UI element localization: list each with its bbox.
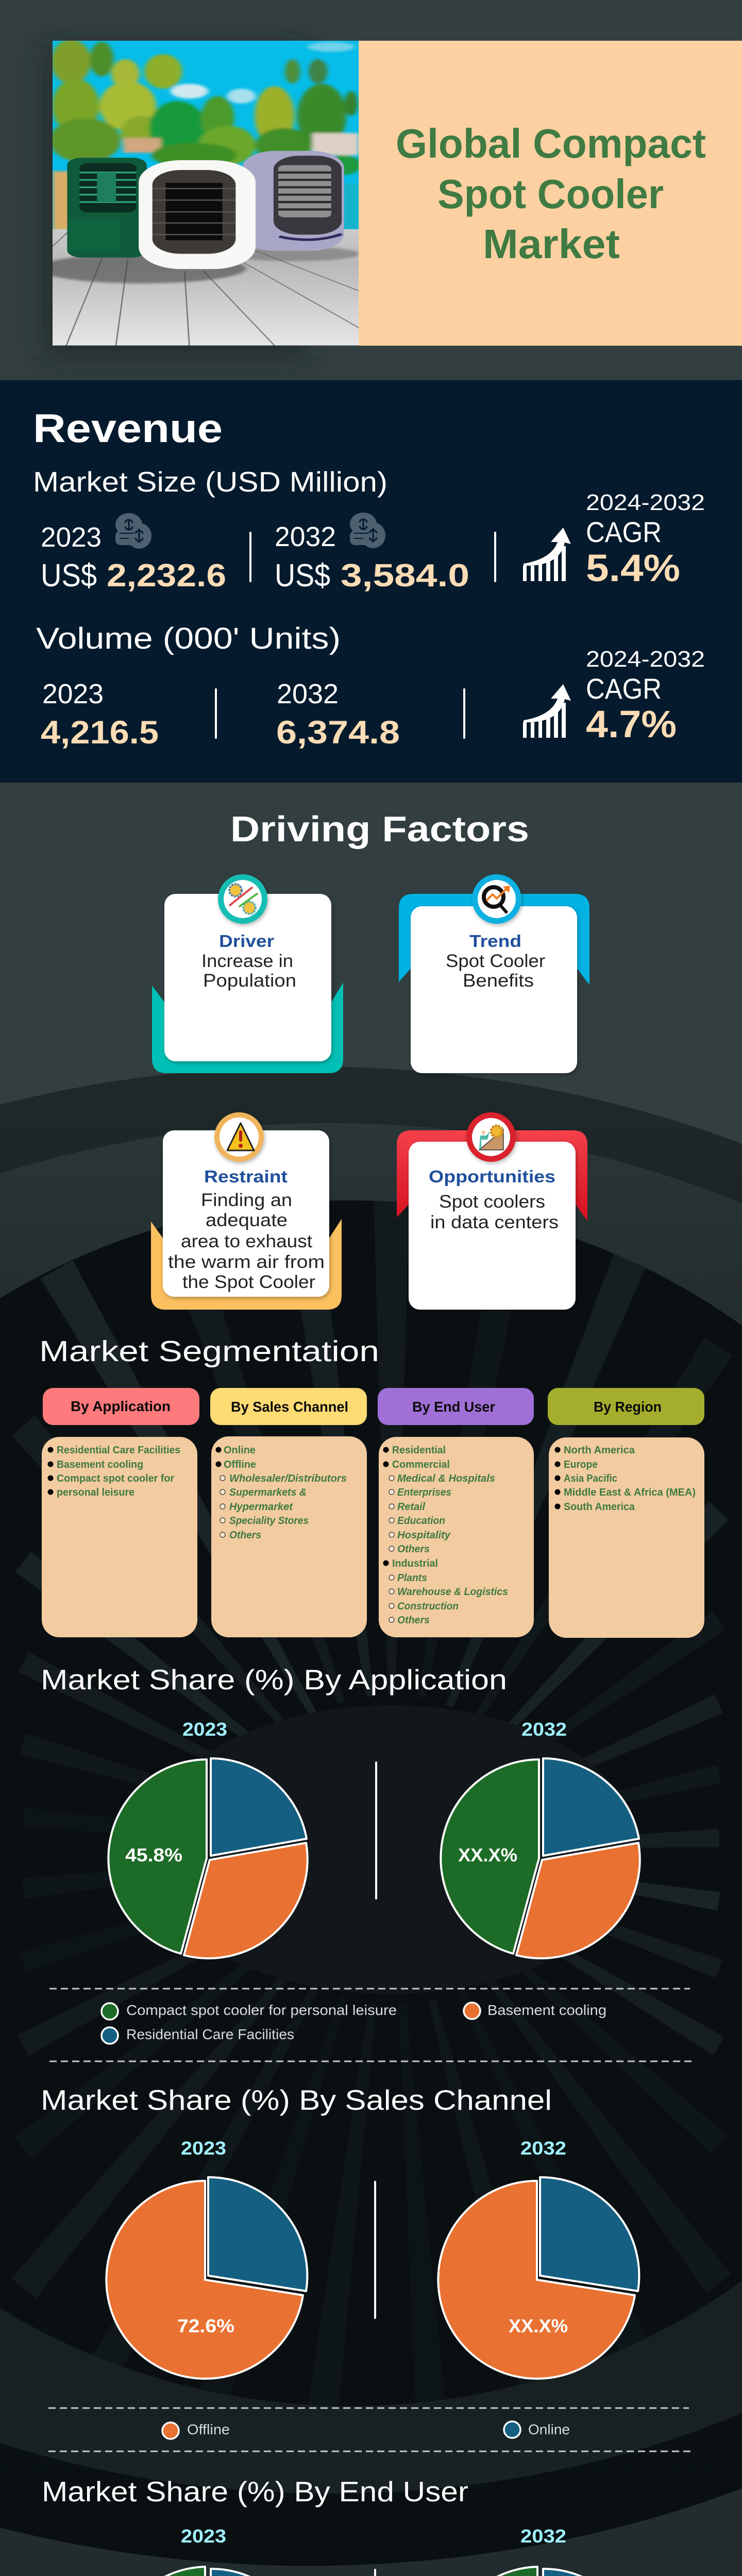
list: sales channel: Speciality Stores [229,1515,309,1527]
pie chart: sales channel 2032 [438,2138,639,2379]
CAGR revenue [586,490,705,589]
pie chart: application 2032: XX.X% [458,1844,517,1866]
revenue heading: Revenue [33,405,223,451]
panel: trend [399,874,589,1073]
hero photo: three compact coolers on a deck [38,40,361,346]
panel: by region [548,1388,704,1638]
list: end user: Education [397,1515,445,1527]
list: application: Residential Care Facilities [57,1445,180,1456]
icon: coins 2032 [350,513,385,548]
list: end user: Commercial [392,1459,450,1470]
panel: trend: Spot Cooler [446,951,545,971]
CAGR volume: CAGR [586,672,662,705]
pie chart: application 2023: 2023 [182,1719,227,1740]
legend: application: Compact spot cooler for personal leisure [126,2002,397,2018]
list: end user: Hospitality [397,1530,451,1541]
market size 2023 [41,513,226,594]
list: region: South America [564,1501,635,1513]
icon: restraint [214,1112,264,1162]
panel: by sales channel [210,1388,367,1637]
heading: market share by end user: Market Share (%) By End User [42,2476,468,2507]
white cooler [139,160,256,269]
icon: opportunities [466,1112,516,1162]
panel: driver: Driver [219,931,274,951]
hero banner [0,0,742,380]
CAGR revenue: 2024-2032 [586,490,705,515]
CAGR volume: 4.7% [586,703,677,745]
list: sales channel [215,1445,347,1541]
title [396,121,706,267]
panel: by region: By Region [594,1399,662,1415]
market size 2023: 2,232.6 [107,558,226,594]
panel: trend: Benefits [463,971,534,991]
list: end user [383,1445,508,1626]
list: region: North America [564,1445,635,1456]
title: Spot Cooler [437,171,664,217]
list: application: personal leisure [57,1487,134,1498]
panel: opportunities [397,1112,587,1310]
panel: by end user: By End User [412,1399,495,1415]
panel: by sales channel: By Sales Channel [231,1399,348,1415]
market size 2032 [275,513,469,594]
panel: by application [42,1388,199,1637]
panel: restraint [151,1112,342,1310]
icon: coins 2023 [115,513,151,549]
market size 2032: US$ [275,558,330,594]
list: end user: Warehouse & Logistics [397,1586,508,1598]
icon: growth arrow 1 [523,528,571,581]
pie chart: sales channel 2023: 2023 [181,2138,226,2159]
pie chart: application 2032: 2032 [521,1719,567,1740]
volume 2032 [276,679,400,751]
panel: opportunities: Spot coolers [439,1192,545,1212]
icon: trend [472,874,521,924]
list: sales channel: Offline [224,1459,256,1470]
list: end user: Medical & Hospitals [397,1473,495,1484]
legend: application: Basement cooling [487,2002,606,2018]
icon: driver [218,874,267,924]
list: region: Europe [564,1459,598,1470]
title: Market [483,221,620,267]
list: region: Asia Pacific [564,1473,617,1484]
panel: trend: Trend [469,931,521,951]
pie chart: sales channel 2032: 2032 [520,2138,566,2159]
list: end user: Residential [392,1445,446,1456]
panel: opportunities: in data centers [430,1212,559,1232]
list: application: Basement cooling [57,1459,143,1470]
pie chart: application 2032 [441,1719,640,1958]
legend: sales channel [162,2421,570,2439]
panel: driver [152,874,343,1073]
list: sales channel: Supermarkets & [229,1487,307,1498]
market size 2023: 2023 [41,522,102,553]
market size 2032: 2032 [275,521,336,552]
pie chart: end user 2023 [107,2526,310,2576]
list: end user: Construction [397,1601,459,1612]
CAGR volume [586,647,705,745]
pie chart: end user 2032: 2032 [520,2526,566,2547]
legend: application [102,2002,606,2044]
volume 2032: 6,374.8 [276,715,400,751]
list: sales channel: Online [224,1445,256,1456]
green cooler [67,158,147,258]
list: region: Middle East & Africa (MEA) [564,1487,696,1498]
title: Global Compact [396,121,706,166]
heading: market share by sales channel: Market Share (%) By Sales Channel [41,2084,552,2116]
list: application: Compact spot cooler for [57,1473,174,1484]
list: end user: Others [397,1615,430,1626]
panel: by end user [378,1388,534,1637]
pie chart: sales channel 2032: XX.X% [509,2315,568,2336]
list: application [47,1445,180,1498]
market size 2032: 3,584.0 [341,558,469,594]
decorative wheel background [0,1066,742,2566]
panel: revenue [0,380,742,783]
panel: restraint: Restraint [204,1167,288,1186]
volume 2032: 2032 [277,679,339,709]
panel: by application: By Application [71,1398,171,1414]
market size 2023: US$ [41,558,97,594]
pie chart: application 2023: 45.8% [125,1844,182,1866]
CAGR volume: 2024-2032 [586,647,705,672]
heading: market share by application: Market Share (%) By Application [41,1664,507,1696]
list: region [554,1445,696,1513]
heading: driving factors: Driving Factors [230,809,529,849]
pie chart: end user 2023: 2023 [181,2526,226,2547]
pie chart: sales channel 2023: 72.6% [177,2315,234,2336]
pie chart: application 2023 [108,1719,308,1958]
list: end user: Plants [397,1572,427,1584]
icon: growth arrow 2 [523,684,571,738]
legend: sales channel: Offline [187,2421,230,2437]
volume subheading: Volume (000' Units) [36,622,341,655]
list: end user: Retail [397,1501,425,1513]
title panel [359,41,742,346]
panel: restraint: Finding an [201,1190,292,1210]
panel: opportunities: Opportunities [429,1167,555,1186]
volume 2023 [41,679,159,751]
legend: application: Residential Care Facilities [126,2026,294,2042]
panel: restraint: area to exhaust [181,1231,312,1251]
CAGR revenue: CAGR [586,516,662,548]
purple cooler [242,151,344,251]
list: sales channel: Wholesaler/Distributors [229,1473,347,1484]
list: sales channel: Hypermarket [229,1501,293,1513]
heading: market segmentation: Market Segmentation [39,1335,379,1368]
volume 2023: 2023 [42,679,104,709]
list: end user: Others [397,1544,430,1555]
legend: sales channel: Online [528,2421,570,2437]
CAGR revenue: 5.4% [586,547,680,589]
market size subheading: Market Size (USD Million) [33,466,387,498]
panel: restraint: adequate [206,1210,288,1230]
pie chart: end user 2032 [439,2526,642,2576]
panel: driver: Population [203,971,296,991]
panel: restraint: the warm air from [168,1252,325,1272]
list: end user: Enterprises [397,1487,451,1498]
volume 2023: 4,216.5 [41,715,159,751]
panel: restraint: the Spot Cooler [182,1272,315,1292]
list: end user: Industrial [392,1558,438,1569]
panel: driver: Increase in [201,951,293,971]
pie chart: sales channel 2023 [106,2138,307,2379]
list: sales channel: Others [229,1530,261,1541]
